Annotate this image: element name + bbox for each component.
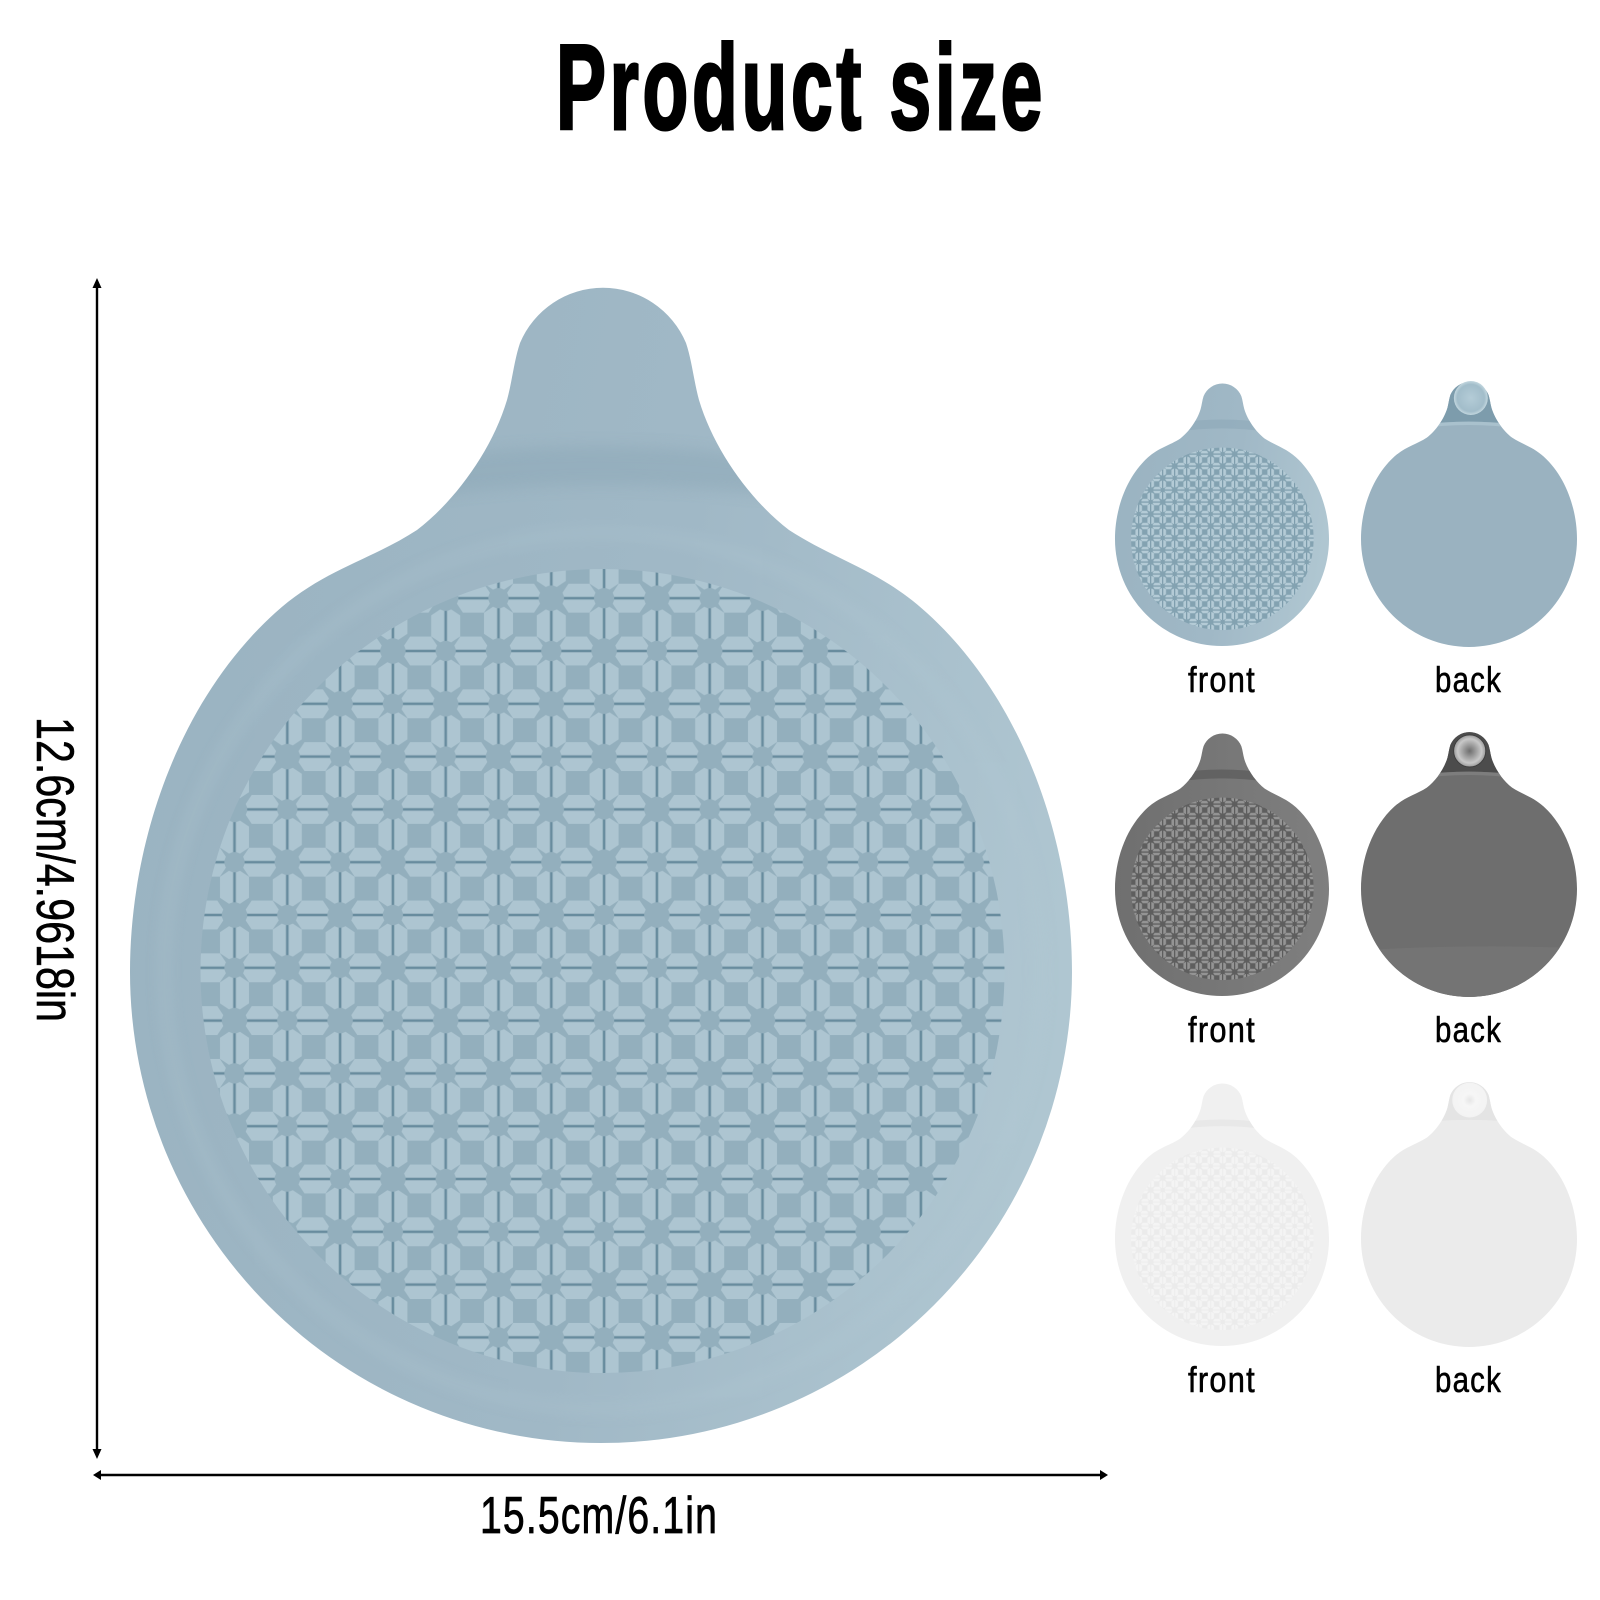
title: Product size [556,19,1046,155]
main product: blue mat front view [130,288,1072,1443]
thumbnail labels [1188,659,1502,1400]
label: front row 1: front [1188,659,1256,700]
thumbnail: grey back [1359,730,1579,999]
label: back row 1: back [1435,659,1502,700]
height label: 12.6cm/4.9618in [25,717,84,1022]
suction cup [1454,735,1486,767]
suction cup [1454,381,1488,415]
label: front row 2: front [1188,1009,1256,1050]
label: front row 3: front [1188,1359,1256,1400]
thumbnail: grey front [1115,734,1329,996]
width dimension arrow [93,1470,1108,1480]
thumbnail: white front [1115,1084,1329,1346]
suction cup [1452,1083,1487,1117]
thumbnail: white back [1361,1080,1577,1347]
height dimension arrow [92,278,102,1459]
label: back row 2: back [1435,1009,1502,1050]
thumbnail: blue front [1115,384,1329,646]
thumbnail: blue back [1361,380,1577,647]
label: back row 3: back [1435,1359,1502,1400]
width label: 15.5cm/6.1in [480,1487,718,1545]
textured pattern area [200,569,1004,1373]
